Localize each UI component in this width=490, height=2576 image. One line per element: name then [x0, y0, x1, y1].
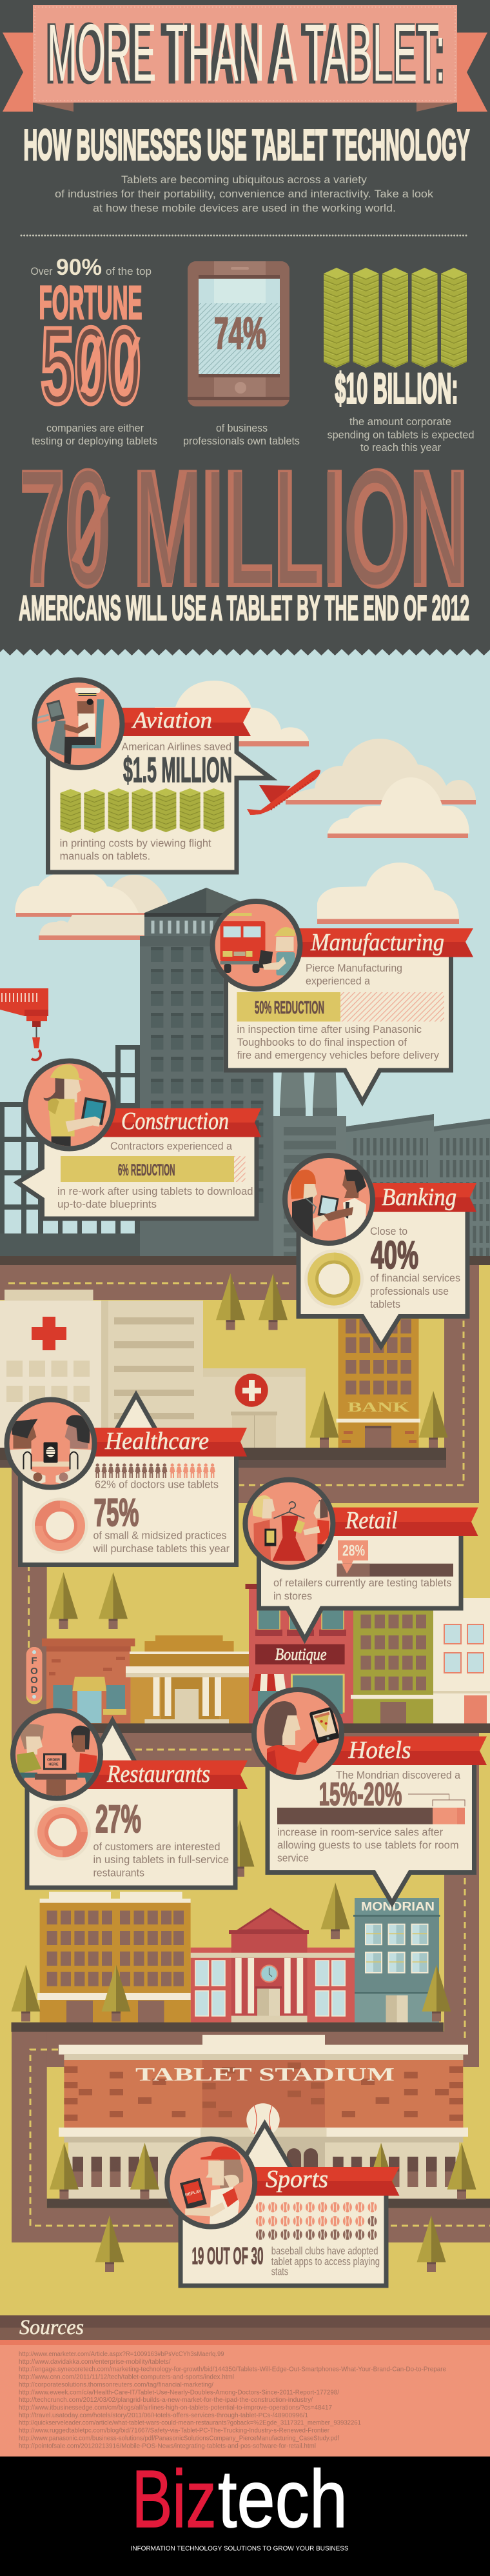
food sign: O: [30, 1675, 38, 1686]
icon: restaurant diners: [13, 1711, 101, 1799]
intro text: Tablets are becoming ubiquitous across a variety: [121, 174, 368, 186]
stat: fortune 500: 90%: [56, 255, 102, 280]
icon: bankers: [285, 1155, 373, 1243]
hospital: [0, 1290, 306, 1448]
panel: manufacturing: [213, 901, 473, 1102]
panel: retail: in stores: [273, 1591, 312, 1603]
progress bar: 6% reduction: 6% REDUCTION: [118, 1161, 175, 1179]
sky background with zigzag edge: [0, 649, 490, 1264]
panel: restaurants: [13, 1711, 248, 1888]
source list: http://travel.usatoday.com/hotels/story/2011/06/Hotels-offers-services-through-tablet-PCs-/48900996/1: [19, 2411, 308, 2419]
stat: tablet 74%: [183, 261, 300, 447]
panel: aviation: in printing costs by viewing flight: [60, 837, 211, 849]
stat: tablet 74%: 74%: [214, 308, 266, 358]
donut chart: 27%: [34, 1804, 91, 1861]
tall office building: [140, 888, 273, 1256]
panel: healthcare: will purchase tablets this year: [93, 1543, 230, 1555]
ribbon heading: manufacturing: Manufacturing: [310, 929, 444, 956]
ribbon heading: restaurants: Restaurants: [106, 1761, 210, 1788]
stat: fortune 500: FORTUNE: [39, 277, 142, 329]
icon: doctors: [6, 1400, 94, 1489]
warehouse: [37, 1892, 191, 2022]
tagline: INFORMATION TECHNOLOGY SOLUTIONS TO GROW YOUR BUSINESS: [131, 2544, 349, 2552]
source list: http://corporatesolutions.thomsonreuters.com/tag/financial-marketing/: [19, 2381, 213, 2388]
logo wordmark: Biz: [132, 2453, 217, 2544]
order here tablet: HERE: [48, 1763, 59, 1767]
icon: baseball player: [167, 2139, 255, 2227]
trees: [12, 1273, 451, 2022]
panel: construction: Contractors experienced a: [110, 1141, 233, 1152]
icon: red cross: [32, 1317, 66, 1350]
icon: money stacks: [324, 268, 467, 368]
panel: aviation: American Airlines saved: [121, 741, 231, 753]
stat: fortune 500: of the top: [106, 266, 152, 277]
panel: banking: of financial services: [370, 1273, 460, 1284]
food sign: D: [31, 1684, 38, 1695]
ribbon heading: sports: Sports: [266, 2166, 328, 2193]
panel: restaurants: 27%: [95, 1797, 141, 1841]
source list: http://www.davidakka.com/enterprise-mobility/tablets/: [19, 2358, 171, 2366]
crane: [0, 988, 48, 1060]
panel: banking: 40%: [371, 1233, 418, 1277]
callout tag: 28%: 28%: [342, 1543, 365, 1560]
bar chart: 15-20%: [277, 1794, 465, 1824]
panel: hotels: 15%-20%: [318, 1776, 402, 1812]
progress bar: 50% reduction: [237, 992, 444, 1022]
donut chart: 75%: [32, 1497, 88, 1554]
panel: aviation: $1.5 MILLION: [123, 750, 232, 790]
panel: restaurants: of customers are interested: [93, 1841, 220, 1853]
scaffold building: [0, 1045, 140, 1256]
source list: http://www.panasonic.com/business-solutions/pdf/PanasonicSolutionsCompany_PierceManufacturing_CaseStudy.pdf: [19, 2434, 339, 2442]
ribbon heading: hotels: [329, 1737, 487, 1765]
donut chart: 40%: [304, 1250, 364, 1309]
panel: sports: baseball clubs have adopted: [271, 2246, 378, 2257]
panel: sports: 19 OUT OF 30: [192, 2242, 263, 2270]
food sign: O: [30, 1666, 38, 1677]
ground and roads: [0, 1256, 490, 2315]
stat: 10 billion: the amount corporate: [349, 416, 451, 428]
panel: sports: stats: [271, 2266, 288, 2278]
pictogram: 62% of doctors: [95, 1463, 215, 1478]
restaurant building: [26, 1639, 135, 1723]
panel: manufacturing: fire and emergency vehicles before delivery: [237, 1050, 440, 1061]
panel: retail: [245, 1480, 478, 1639]
panel: banking: [285, 1155, 476, 1346]
stat: 10 billion: to reach this year: [360, 442, 441, 454]
source list: http://techcrunch.com/2012/03/02/plangrid-builds-a-new-market-for-the-ipad-the-construction-industry/: [19, 2396, 313, 2404]
panel: healthcare: [6, 1395, 247, 1565]
bar chart: 28%: [337, 1564, 453, 1577]
stat: tablet 74%: professionals own tablets: [183, 435, 300, 447]
ribbon heading: hotels: Hotels: [348, 1737, 411, 1764]
panel: hotels: increase in room-service sales after: [277, 1827, 443, 1839]
icon: retail shoppers: [245, 1480, 333, 1569]
source list: http://engage.synecoretech.com/marketing-technology-for-growth/bid/144350/Tablets-Will-Edge-Out-Smartphones-What-Your-Brand-Can-Do-to-Prepare: [19, 2366, 446, 2373]
progress bar: 50% reduction: 50% REDUCTION: [255, 997, 324, 1017]
progress bar: 6% reduction: [61, 1156, 245, 1182]
source list: http://www.cnn.com/2011/11/12/tech/tablet-computers-and-sports/index.html: [19, 2373, 234, 2381]
stat: fortune 500: 500: [41, 306, 141, 424]
replay tablet label: REPLAY: [184, 2189, 202, 2198]
panel: aviation: [34, 680, 271, 872]
stat: 10 billion: spending on tablets is expected: [328, 430, 475, 441]
intro text: of industries for their portability, convenience and interactivity. Take a look: [55, 188, 434, 200]
icon: baseball: [246, 2103, 280, 2137]
mondrian hotel: [353, 1898, 440, 2022]
stadium sign: TABLET STADIUM: [135, 2064, 395, 2085]
panel: restaurants: restaurants: [93, 1867, 144, 1879]
ribbon heading: retail: [322, 1507, 478, 1536]
panel: manufacturing: in inspection time after using Panasonic: [237, 1024, 422, 1035]
title ribbon: [3, 5, 487, 112]
source list: http://www.ruggedtabletpc.com/blog/bid/71667/Safety-via-Tablet-PC-The-Trucking-Industry-s-Renewed-Frontier: [19, 2427, 329, 2435]
panel: banking: professionals use: [370, 1286, 449, 1297]
building row: warehouse, school, mondrian hotel: [37, 1892, 440, 2022]
footer: biztech logo: [0, 2453, 490, 2576]
tablet stadium: [47, 2035, 490, 2272]
source list: http://quickserveleader.com/article/what-tablet-wars-could-mean-restaurants?goback=%2Egde_3117321_member_93932261: [19, 2419, 361, 2427]
ribbon heading: restaurants: [84, 1761, 248, 1789]
panel: banking: Close to: [370, 1226, 407, 1237]
icon: pilot: [34, 680, 122, 768]
source list: http://www.itbusinessedge.com/cm/blogs/all/airlines-high-on-tablets-potential-to-improve-operations/?cs=48417: [19, 2404, 332, 2411]
logo wordmark: [132, 2453, 348, 2544]
panel: hotels: [254, 1690, 487, 1903]
sources section: [0, 2315, 490, 2457]
panel: healthcare: 62% of doctors use tablets: [95, 1479, 219, 1491]
panel: healthcare: 75%: [94, 1491, 139, 1534]
ribbon heading: banking: [361, 1183, 476, 1212]
intro text: [55, 174, 434, 214]
food sign: [26, 1647, 42, 1704]
lane markings: [8, 1283, 490, 2226]
icon: contractor: [26, 1061, 113, 1150]
stat: fortune 500: [31, 255, 157, 447]
icon: tablet: [188, 261, 289, 406]
panel: hotels: The Mondrian discovered a: [336, 1770, 461, 1781]
ribbon heading: healthcare: Healthcare: [104, 1428, 209, 1455]
ribbon heading: construction: Construction: [121, 1108, 229, 1135]
ribbon heading: healthcare: [84, 1428, 247, 1457]
order here tablet: ORDER: [47, 1759, 60, 1762]
source list: http://pointofsale.com/20120213916/Mobile-POS-News/integrating-tablets-and-pos-software-for-retail.html: [19, 2442, 316, 2450]
stat: 10 billion: [324, 268, 475, 454]
boutique building: [245, 1584, 353, 1724]
panel: healthcare: of small & midsized practices: [93, 1530, 227, 1542]
bank building: [337, 1316, 420, 1448]
clouds: [15, 681, 476, 940]
ribbon heading: banking: Banking: [382, 1184, 456, 1211]
ribbon heading: retail: Retail: [345, 1507, 398, 1534]
logo wordmark: tech: [218, 2453, 348, 2544]
panel: sports: [167, 2124, 400, 2286]
boutique sign: [255, 1644, 345, 1664]
white apartments: [433, 1598, 490, 1724]
stat: fortune 500: Over: [31, 266, 53, 277]
stat: fortune 500: 500: [41, 306, 141, 424]
stat: fortune 500: companies are either: [46, 423, 144, 434]
pictogram: 19 of 30 baseballs: [256, 2202, 377, 2240]
sources heading: Sources: [19, 2316, 84, 2339]
icon: fire truck and worker: [213, 901, 300, 989]
panel: retail: of retailers currently are testing tablets: [273, 1577, 451, 1589]
food sign: F: [31, 1655, 37, 1666]
panel: banking: tablets: [370, 1299, 400, 1310]
panel: sports: tablet apps to access playing: [271, 2256, 380, 2268]
panel: manufacturing: Pierce Manufacturing: [306, 963, 402, 974]
intro text: at how these mobile devices are used in the working world.: [93, 203, 396, 214]
icon: hotel guest: [254, 1690, 342, 1780]
library building: [126, 1635, 253, 1724]
green apartments: [351, 1608, 433, 1724]
source list: http://www.eweek.com/c/a/Health-Care-IT/Tablet-Use-Nearly-Doubles-Among-Doctors-Since-2011-Report-177298/: [19, 2388, 339, 2396]
order here tablet: [43, 1753, 66, 1770]
panel: aviation: manuals on tablets.: [60, 851, 150, 863]
panel: manufacturing: Toughbooks to do final inspection of: [237, 1037, 407, 1048]
panel: restaurants: in using tablets in full-service: [93, 1854, 229, 1866]
icon: airplane: [247, 770, 320, 815]
ribbon heading: aviation: Aviation: [132, 707, 212, 733]
panel: hotels: allowing guests to use tablets for room: [277, 1840, 459, 1852]
clock: [260, 1965, 277, 1982]
boutique sign: Boutique: [275, 1645, 327, 1664]
ribbon heading: aviation: [110, 707, 251, 736]
source list: [19, 2350, 446, 2450]
school: [191, 1909, 355, 2022]
city skyline: [0, 888, 490, 1256]
panel: hotels: service: [277, 1853, 309, 1864]
icon: money stacks: [61, 788, 224, 833]
bank sign: BANK: [348, 1399, 410, 1415]
callout tag: 28%: [338, 1541, 368, 1573]
factory: [273, 1058, 490, 1256]
stat: tablet 74%: of business: [216, 423, 268, 434]
panel: construction: [17, 1061, 261, 1219]
panel: construction: in re-work after using tablets to download: [57, 1186, 253, 1197]
ribbon heading: sports: [245, 2166, 400, 2196]
panel: manufacturing: experienced a: [306, 975, 371, 987]
stat: fortune 500: testing or deploying tablets: [32, 435, 157, 447]
panel: construction: up-to-date blueprints: [57, 1199, 157, 1210]
road network: [0, 1265, 490, 2242]
icon: hospital sign: [235, 1373, 268, 1407]
building row: restaurant, library, boutique, apartments: [26, 1584, 490, 1724]
hotel sign: MONDRIAN: [361, 1901, 435, 1914]
source list: http://www.emarketer.com/Article.aspx?R=1009163#bPsVcCYh3sMaerlq.99: [19, 2350, 224, 2358]
header section: [0, 0, 490, 658]
